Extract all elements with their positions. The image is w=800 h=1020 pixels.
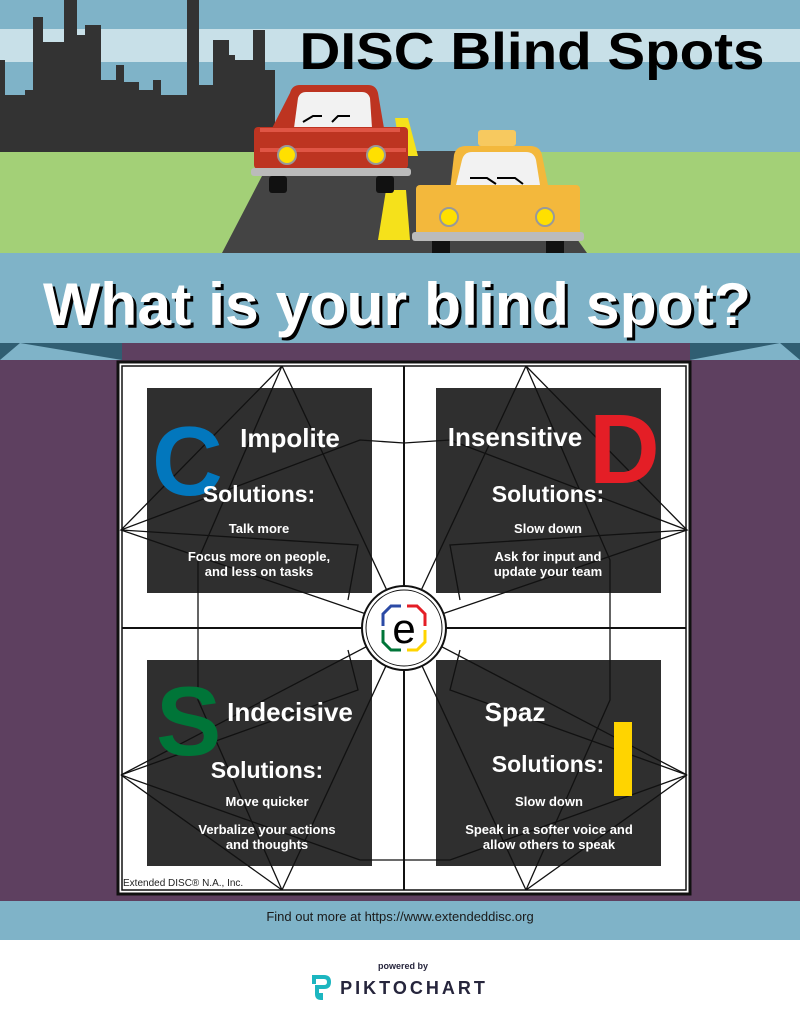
panel: I: Spaz xyxy=(485,697,545,727)
panel: D: Solutions: xyxy=(492,481,604,507)
panel: C: C xyxy=(152,406,223,516)
copyright: Extended DISC® N.A., Inc. xyxy=(123,878,243,889)
panel: D: Slow down xyxy=(514,521,582,536)
panel: S xyxy=(156,666,353,852)
panel: D: Ask for input and xyxy=(495,549,602,564)
header scene xyxy=(0,0,800,253)
panel: S: Indecisive xyxy=(227,697,353,727)
panel: C: and less on tasks xyxy=(205,564,313,579)
panel: S: S xyxy=(156,666,221,776)
panel: C xyxy=(152,406,340,579)
panel: I: Solutions: xyxy=(492,751,604,777)
panel: C: Solutions: xyxy=(203,481,315,507)
footer band xyxy=(0,901,800,940)
icon: yellow taxi xyxy=(412,130,584,253)
icon: center e logo xyxy=(362,586,446,670)
title: DISC Blind Spots xyxy=(300,23,764,81)
grass xyxy=(0,152,800,253)
panel: D xyxy=(448,394,660,579)
panel: I: Speak in a softer voice and xyxy=(465,822,633,837)
banner: question: What is your blind spot? xyxy=(43,271,751,338)
star lines xyxy=(121,366,687,890)
banner: question xyxy=(0,253,800,343)
panel: C: Impolite xyxy=(240,423,340,453)
piktochart credit: PIKTOCHART xyxy=(340,978,488,998)
panel: C: Focus more on people, xyxy=(188,549,330,564)
panel: D: update your team xyxy=(494,564,602,579)
panel: D: Insensitive xyxy=(448,422,582,452)
skyline xyxy=(0,0,275,152)
panel: S: and thoughts xyxy=(226,837,308,852)
icon: red car xyxy=(251,85,411,193)
footer band: Find out more at https://www.extendeddisc.org xyxy=(266,909,534,924)
piktochart credit xyxy=(314,961,488,998)
dark boxes xyxy=(147,388,372,593)
DISC board xyxy=(118,362,690,894)
panel: S: Solutions: xyxy=(211,757,323,783)
panel: I: allow others to speak xyxy=(483,837,616,852)
road xyxy=(222,151,587,253)
panel: C: Talk more xyxy=(229,521,289,536)
piktochart credit: powered by xyxy=(378,961,428,971)
panel: D: D xyxy=(589,394,660,504)
panel: S: Move quicker xyxy=(225,794,309,809)
panel: S: Verbalize your actions xyxy=(198,822,336,837)
icon: center e logo: e xyxy=(392,605,416,652)
banner: question: What is your blind spot? xyxy=(46,274,754,341)
panel: I xyxy=(465,697,633,852)
panel: I: Slow down xyxy=(515,794,583,809)
purple background panel xyxy=(0,343,800,901)
